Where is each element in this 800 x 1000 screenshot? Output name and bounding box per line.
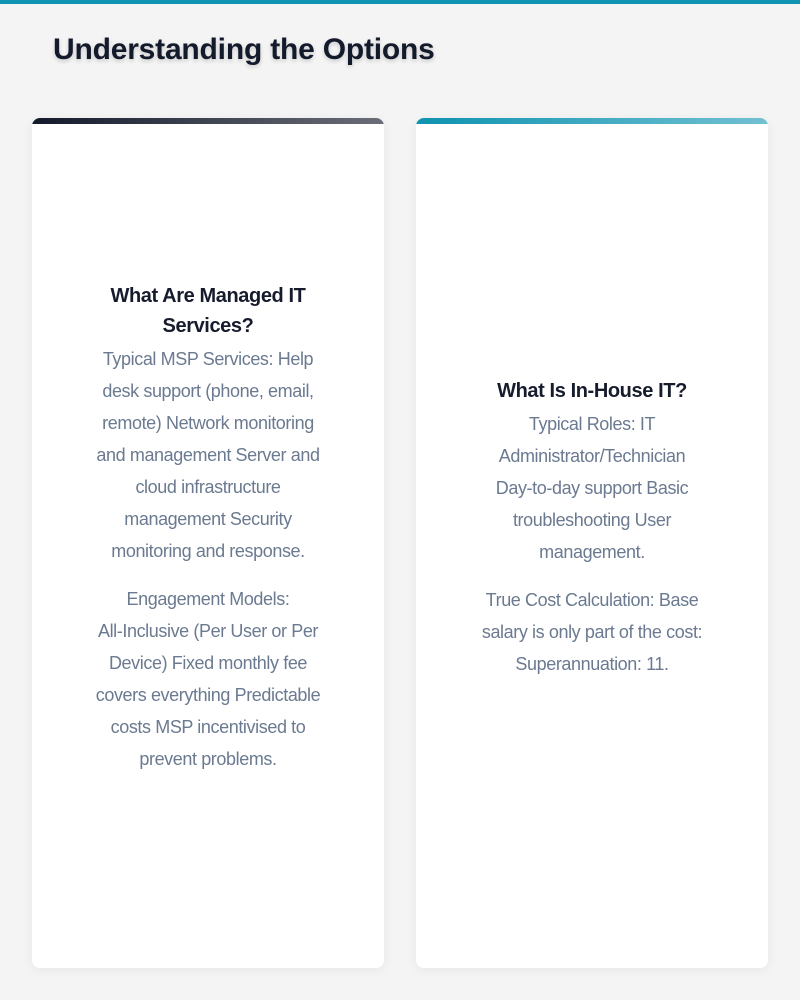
text: typical MSP services: and management Server and: [96, 445, 320, 465]
text: typical MSP services: desk support (phone, email,: [102, 381, 314, 401]
panel: in-house IT: [416, 118, 768, 968]
text: typical roles: Typical Roles: IT: [529, 414, 655, 434]
text: typical roles: Administrator/Technician: [499, 446, 685, 466]
text: engagement models: Device) Fixed monthly fee: [109, 653, 307, 673]
text: typical MSP services: remote) Network monitoring: [102, 413, 314, 433]
heading: managed IT: Services?: [163, 315, 253, 337]
text: typical MSP services: management Security: [124, 509, 292, 529]
text: typical MSP services: [96, 349, 320, 561]
text: typical roles: Day-to-day support Basic: [496, 478, 688, 498]
text: typical MSP services: monitoring and response.: [111, 541, 305, 561]
text: engagement models: Engagement Models:: [127, 589, 289, 609]
text: typical roles: management.: [539, 542, 645, 562]
panel: managed IT services: [32, 118, 384, 968]
text: true cost calculation: True Cost Calculation: Base: [486, 590, 698, 610]
text: true cost calculation: salary is only part of the cost:: [482, 622, 702, 642]
text: engagement models: costs MSP incentivised to: [111, 717, 305, 737]
heading: in-house IT: What Is In-House IT?: [497, 380, 687, 402]
text: true cost calculation: [482, 590, 702, 674]
text: engagement models: covers everything Predictable: [96, 685, 320, 705]
text: true cost calculation: Superannuation: 11.: [515, 654, 669, 674]
text: engagement models: All-Inclusive (Per User or Per: [98, 621, 318, 641]
text: engagement models: prevent problems.: [139, 749, 277, 769]
title: Understanding the Options: [53, 33, 435, 66]
heading: managed IT: What Are Managed IT: [110, 285, 306, 307]
heading: managed IT: [110, 285, 306, 337]
text: typical MSP services: Typical MSP Services: Help: [103, 349, 313, 369]
text: engagement models: [96, 589, 320, 769]
text: typical roles: troubleshooting User: [513, 510, 671, 530]
text: typical roles: [496, 414, 688, 562]
text: typical MSP services: cloud infrastructure: [135, 477, 281, 497]
